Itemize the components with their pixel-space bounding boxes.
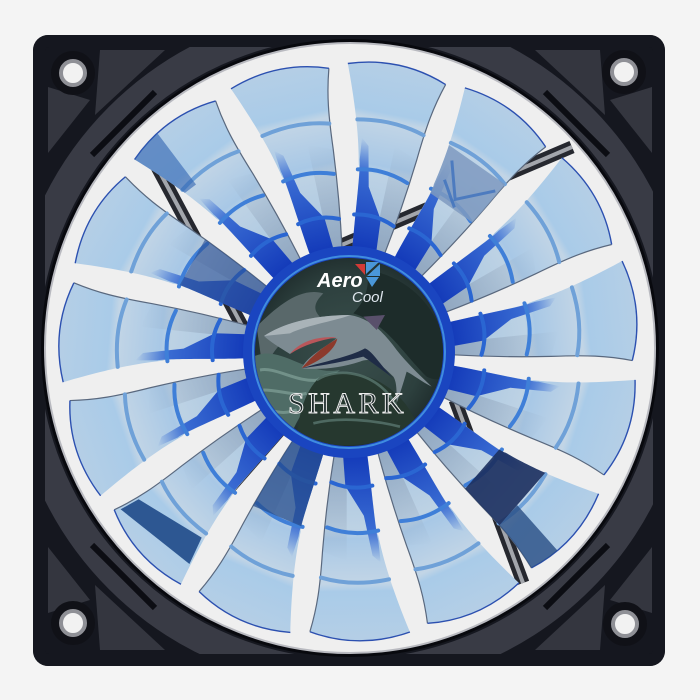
logo text Cool: Cool xyxy=(352,289,384,306)
blade 5 xyxy=(441,260,642,382)
blade 12 xyxy=(60,342,273,498)
hub ring xyxy=(243,246,455,458)
frame rim band xyxy=(45,47,653,654)
blade 10 xyxy=(198,441,324,634)
hub label with shark artwork xyxy=(253,258,447,446)
frame struts xyxy=(157,147,572,583)
blade 8 xyxy=(351,418,522,632)
blade 6 xyxy=(432,327,643,478)
blade 4 xyxy=(406,154,620,337)
blade 11 xyxy=(114,410,284,585)
logo mark xyxy=(355,262,380,287)
logo text Aero: Aero xyxy=(316,270,363,292)
blade 14 xyxy=(74,176,266,315)
blade 15 xyxy=(134,100,300,278)
blade 7 xyxy=(417,408,600,568)
fan opening xyxy=(41,39,659,657)
blade 9 xyxy=(307,450,410,642)
shark xyxy=(264,315,432,403)
blade 1 xyxy=(229,59,369,266)
corner panels xyxy=(48,50,652,650)
blade 3 xyxy=(395,87,546,276)
wave artwork xyxy=(253,270,447,445)
blade 2 xyxy=(313,56,448,261)
fan blades xyxy=(55,56,643,642)
blade 13 xyxy=(55,282,253,398)
frame corner diagonals xyxy=(92,92,608,608)
product name SHARK: SHARK xyxy=(288,387,407,420)
mounting holes xyxy=(51,50,647,646)
